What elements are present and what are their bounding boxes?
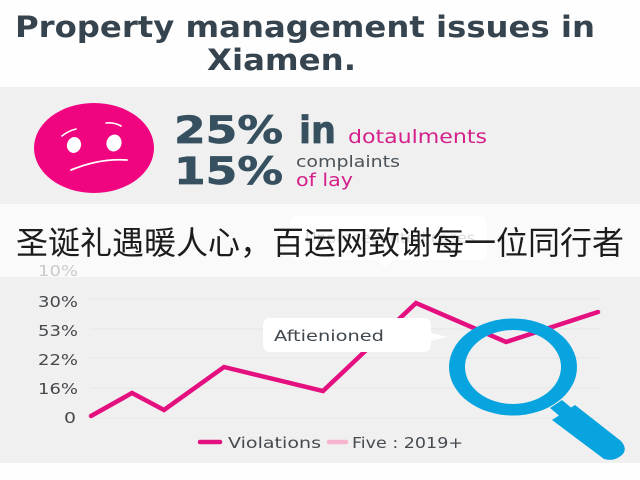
panel: line chart [0, 277, 640, 463]
legend: Five : 2019+ [352, 434, 463, 452]
icon: magnifying glass [449, 318, 625, 460]
statistic: 15%: 15% [174, 150, 283, 193]
legend [200, 434, 463, 452]
legend: Violations [228, 434, 321, 452]
y axis labels [38, 293, 78, 427]
title: Xiamen. [207, 43, 356, 77]
panel: statistics [0, 87, 640, 204]
line series: violations [91, 303, 598, 416]
icon: worried face [34, 103, 154, 193]
callout [263, 318, 447, 352]
label: dotaulments: dotaulments [348, 126, 487, 148]
label: of lay: of lay [296, 170, 353, 191]
y axis labels: 0 [64, 409, 76, 427]
faded pill behind banner text [290, 216, 487, 268]
callout: Aftienioned [274, 327, 384, 345]
statistic: 25%: 25% [174, 109, 283, 152]
y axis labels: 30% [38, 293, 78, 311]
overlay banner [0, 204, 640, 280]
title: Property management issues in [15, 10, 595, 44]
statistic word: in: in [299, 109, 336, 152]
y axis labels: 22% [38, 351, 78, 369]
y axis labels: 53% [38, 322, 78, 340]
title [15, 10, 595, 77]
banner text: 圣诞礼遇暖人心，百运网致谢每一位同行者 [16, 218, 624, 264]
y axis labels: 16% [38, 380, 78, 398]
faded axis label: 10% [38, 262, 78, 280]
label: complaints: complaints [296, 152, 400, 171]
faded pill behind banner text: Unprecedented cases [305, 229, 475, 247]
